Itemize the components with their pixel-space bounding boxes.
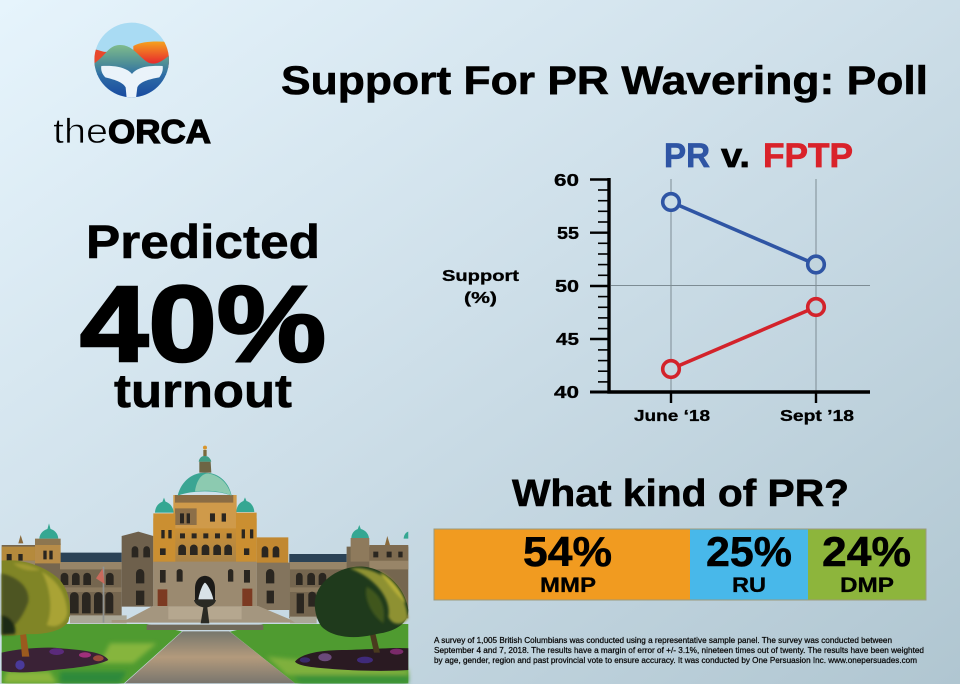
- heading: What kind of PR?: What kind of PR?: [512, 473, 849, 515]
- x axis labels: [634, 408, 854, 425]
- side towers: [153, 513, 257, 562]
- right wing: [289, 547, 408, 618]
- left wing: [2, 545, 122, 617]
- y axis ticks: [590, 180, 609, 382]
- right flower bed: [295, 648, 408, 671]
- footnote: survey methodology: A survey of 1,005 British Columbians was conducted using a representative sample panel. The survey was conducted between: [434, 635, 892, 645]
- right lawn: [230, 624, 408, 683]
- y axis labels: 60: [554, 170, 579, 190]
- logo wordmark: the: the: [53, 112, 108, 151]
- lawn highlights: [3, 643, 408, 683]
- chart heading: PR v. FPTP: FPTP: [763, 137, 853, 175]
- left flower bed: [2, 648, 108, 672]
- segment: RU 25%: [690, 528, 808, 600]
- series: FPTP: [663, 299, 824, 377]
- y axis title: (%): [464, 290, 497, 307]
- y axis labels: [554, 170, 579, 402]
- turnout callout: [80, 215, 326, 417]
- number: 40%: 40%: [80, 263, 326, 384]
- title: Support For PR Wavering: Poll: [281, 59, 928, 103]
- icon: whale tail and mountains: [93, 20, 170, 100]
- footnote: survey methodology: September 4 and 7, 2018. The results have a margin of error of +/- 3.1%, nineteen times out of twenty. The results have been weighted: [434, 645, 924, 655]
- left pavilion: [122, 532, 153, 607]
- stacked bar: PR types: [434, 528, 926, 600]
- logo: theORCA: [53, 20, 211, 151]
- segment: MMP 54%: [434, 528, 690, 600]
- logo wordmark: ORCA: ORCA: [108, 113, 211, 150]
- windows: [7, 513, 403, 613]
- fountain: [194, 583, 216, 623]
- y axis labels: 50: [555, 276, 579, 296]
- doors: [158, 589, 252, 607]
- segment: DMP 24%: [808, 528, 926, 600]
- right pavilion: [257, 537, 288, 563]
- segment: MMP 54%: MMP: [540, 574, 596, 597]
- lantern: [199, 462, 211, 473]
- series: PR: [663, 194, 824, 273]
- walkway: [125, 631, 295, 683]
- segment: RU 25%: 25%: [706, 528, 792, 575]
- left tree: [2, 560, 70, 657]
- drum: [173, 495, 237, 528]
- steps: [112, 606, 295, 623]
- chart heading: PR v. FPTP: v.: [721, 137, 750, 175]
- x axis labels: Sept ’18: [780, 408, 854, 425]
- label: turnout: turnout: [114, 364, 292, 417]
- footnote: survey methodology: [434, 635, 924, 665]
- left lawn: [2, 624, 182, 683]
- segment: RU 25%: RU: [732, 574, 766, 597]
- wing cornice bands: [2, 561, 408, 569]
- illustration: BC Legislature building: [2, 446, 408, 683]
- y axis title: Support: [442, 268, 520, 285]
- y axis title: [442, 268, 520, 307]
- y axis labels: 40: [554, 382, 579, 402]
- central arch: [195, 576, 215, 600]
- upper wing tone: [2, 547, 35, 561]
- flag pole and flag: [96, 567, 105, 623]
- segment: DMP 24%: DMP: [840, 574, 894, 597]
- central block: [153, 518, 257, 563]
- side domes: [39, 497, 369, 539]
- x axis labels: June ‘18: [634, 408, 710, 425]
- segment: DMP 24%: 24%: [822, 528, 911, 575]
- segment: MMP 54%: 54%: [523, 528, 612, 575]
- right tree: [315, 567, 408, 653]
- axes: [590, 178, 870, 403]
- wings roof: [60, 553, 347, 563]
- y axis labels: 45: [556, 329, 579, 349]
- ground strip: [70, 615, 317, 623]
- line chart: support over time: [442, 170, 870, 425]
- y axis labels: 55: [557, 223, 579, 243]
- chart heading: PR v. FPTP: [664, 137, 853, 175]
- central dome: [178, 473, 232, 496]
- fountain plinth: [147, 625, 263, 630]
- label: Predicted: Predicted: [86, 215, 320, 268]
- grid lines: [611, 179, 870, 392]
- footnote: survey methodology: by age, gender, region and past provincial vote to ensure accuracy. It was conducted by One Persuasion Inc. www.onepersuades.com: [434, 655, 917, 665]
- chart heading: PR v. FPTP: PR: [664, 137, 710, 175]
